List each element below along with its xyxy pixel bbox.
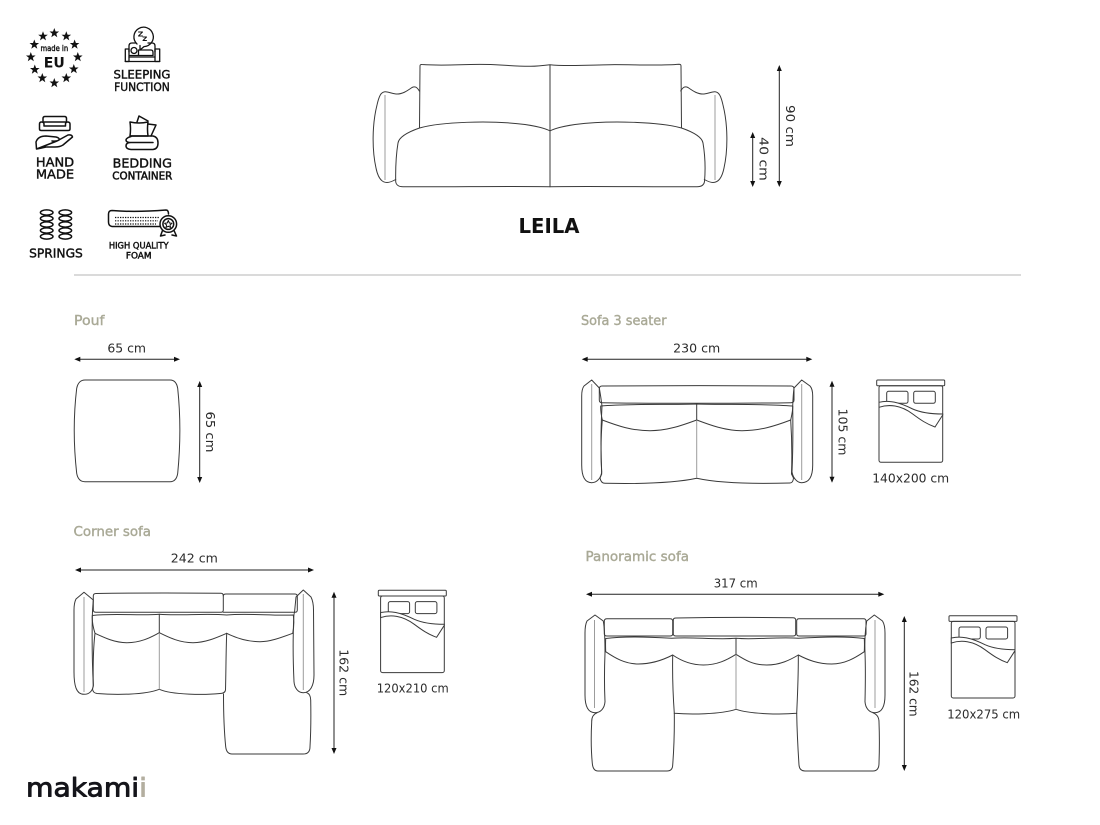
label: sleeping function: FUNCTION [114,80,170,94]
bed 140x200 cm: 140x200 cm [872,470,949,485]
label: bedding container [112,155,172,182]
dimension: 105 cm depth: 105 cm [835,408,850,456]
label: bedding container: BEDDING [113,155,172,170]
dimension: 105 cm depth [830,381,850,483]
sofa 3 seater plan drawing [582,380,813,484]
dimension: 65 cm width [74,341,180,362]
heading: Corner sofa: Corner sofa [74,524,151,540]
label: high quality foam: HIGH QUALITY [109,240,169,250]
icon: made in EU badge: EU [44,55,65,71]
sofa front view drawing [373,64,727,187]
dimension: 65 cm depth [197,381,218,483]
label: high quality foam: FOAM [126,251,152,261]
label: sleeping function: SLEEPING [114,67,170,81]
dimension: 162 cm depth: 162 cm [336,649,351,696]
icon: sleeping function [125,27,160,62]
dimension: 65 cm width: 65 cm [107,341,146,356]
dimension: 40 cm seat height: 40 cm [756,137,771,181]
icon: bedding container [126,116,158,150]
heading: Sofa 3 seater: Sofa 3 seater [581,313,667,329]
dimension: 242 cm width: 242 cm [171,551,218,566]
panoramic sofa plan drawing [585,615,885,771]
heading: Pouf: Pouf [74,313,106,329]
dimension: 317 cm width: 317 cm [714,576,758,591]
heading: Panoramic sofa: Panoramic sofa [586,549,689,565]
dimension: 162 cm depth [902,616,921,771]
bed 120x210 cm: 120x210 cm [377,680,449,695]
label: bedding container: CONTAINER [112,171,172,182]
dimension: 40 cm seat height [750,132,771,187]
icon: high quality foam [108,210,177,236]
dimension: 230 cm width [582,341,812,362]
icon: made in EU badge [26,28,83,87]
label: sleeping function [114,67,170,94]
dimension: 65 cm depth: 65 cm [203,412,218,452]
icon: made in EU badge: made in [40,44,68,53]
dimension: 162 cm depth: 162 cm [906,671,921,717]
label: high quality foam [109,240,169,261]
label: hand made: MADE [36,166,74,181]
label: hand made: HAND [36,155,74,170]
dimension: 162 cm depth [332,592,351,754]
label: springs: SPRINGS [29,245,83,260]
bed 140x200 cm [872,380,949,485]
icon: springs [40,210,72,239]
dimension: 90 cm height: 90 cm [783,105,798,147]
logo: makamii: makam ii [26,774,147,804]
bed 120x275 cm [947,616,1020,721]
dimension: 90 cm height [777,65,798,187]
bed 120x210 cm [377,590,449,695]
title: LEILA: LEILA [518,214,580,238]
bed 120x275 cm: 120x275 cm [947,706,1020,721]
corner sofa plan drawing [74,590,314,754]
label: hand made [36,155,74,181]
dimension: 317 cm width [586,576,884,597]
dimension: 230 cm width: 230 cm [673,341,720,356]
pouf plan drawing [74,380,180,482]
icon: hand made [36,116,72,149]
dimension: 242 cm width [75,551,314,572]
